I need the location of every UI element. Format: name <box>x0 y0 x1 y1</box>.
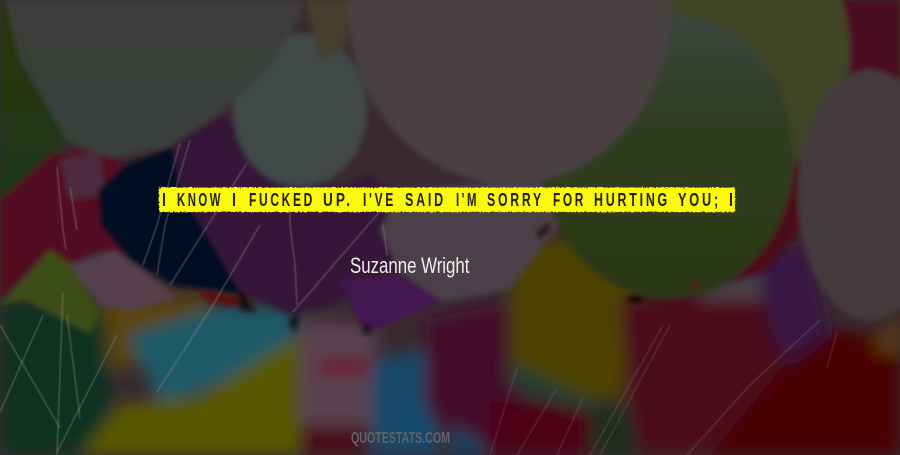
quote text: I <box>232 190 236 210</box>
top-right red <box>820 0 900 110</box>
quote text: UP. <box>323 190 353 210</box>
right pale balloon <box>798 70 900 320</box>
top-left balloon <box>5 0 303 157</box>
red behind green <box>700 165 810 288</box>
navy balloon <box>98 147 245 295</box>
source watermark: QUOTESTATS.COM <box>351 430 450 447</box>
balloon strings <box>0 140 837 455</box>
pale mid balloon <box>380 180 560 302</box>
quote text: I'VE <box>363 190 396 210</box>
pale teal balloon <box>233 33 367 187</box>
author name: Suzanne Wright <box>350 253 469 278</box>
lower balloons, soft focus <box>0 240 900 455</box>
quote text: I <box>729 190 733 210</box>
quote text: HURTING <box>594 190 670 210</box>
quote text: I <box>162 190 166 210</box>
quote text: KNOW <box>177 190 223 210</box>
upper green balloon <box>646 0 850 175</box>
quote text: FOR <box>553 190 586 210</box>
main green balloon <box>542 14 794 298</box>
quote text: SORRY <box>487 190 544 210</box>
quote text: FUCKED <box>249 190 315 210</box>
quote text <box>162 190 733 210</box>
yellow strip <box>159 188 735 212</box>
left balloons <box>0 0 70 200</box>
quote text: I'M <box>456 190 479 210</box>
balloon knots <box>236 292 256 312</box>
centre big balloon <box>348 0 672 184</box>
quote text: YOU; <box>678 190 721 210</box>
purple balloon <box>172 113 410 314</box>
quote on yellow strip <box>158 186 736 213</box>
quote text: SAID <box>405 190 446 210</box>
